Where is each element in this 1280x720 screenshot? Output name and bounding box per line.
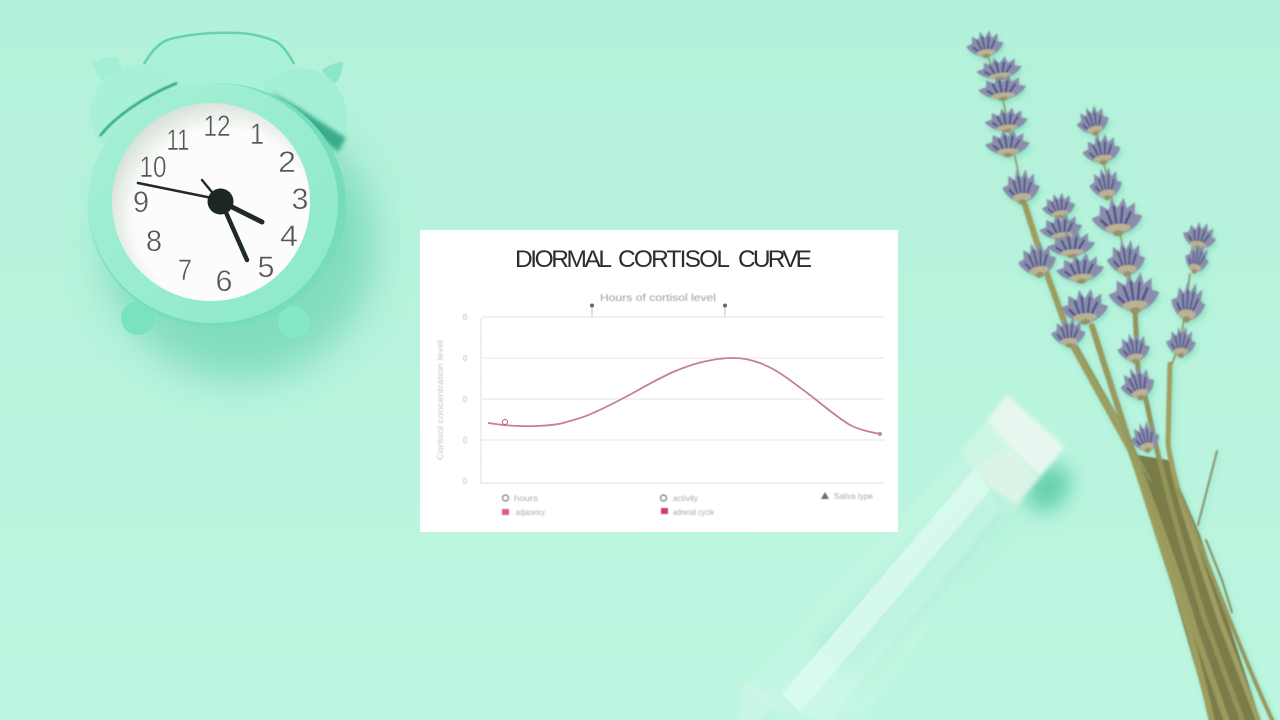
legend item: hours: hours bbox=[514, 494, 538, 503]
grid and axes bbox=[479, 317, 884, 484]
clock face bbox=[112, 103, 310, 301]
clock body bbox=[88, 83, 346, 327]
tube shadow bbox=[810, 455, 1080, 680]
curve start marker bbox=[502, 420, 508, 424]
icon: collection tube bbox=[738, 395, 1065, 720]
lavender stem bundle bbox=[986, 50, 1274, 720]
chart annotation bracket bbox=[590, 304, 727, 317]
clock numerals: 12 bbox=[204, 110, 230, 143]
y-axis label: Cortisol concentration level bbox=[436, 340, 445, 460]
chart title: CURVE bbox=[738, 246, 812, 273]
clock numerals: 7 bbox=[178, 254, 192, 287]
legend item: sample type: Saliva type bbox=[834, 492, 874, 501]
clock bell right bbox=[262, 68, 347, 150]
clock shadow bbox=[105, 110, 375, 380]
clock numerals: 6 bbox=[216, 265, 232, 298]
card background bbox=[420, 230, 898, 532]
clock numerals: 1 bbox=[250, 118, 264, 151]
clock numerals: 5 bbox=[258, 251, 274, 284]
legend item: activity: activity bbox=[673, 494, 698, 503]
legend item: hours bbox=[502, 494, 538, 503]
clock bell left bbox=[90, 64, 185, 160]
tube base bbox=[738, 680, 778, 720]
chart title: CORTISOL bbox=[618, 246, 730, 273]
y-axis tick labels: 0 bbox=[463, 313, 468, 322]
clock hub bbox=[208, 188, 234, 214]
legend item: activity bbox=[660, 494, 698, 503]
clock numerals: 3 bbox=[292, 183, 308, 216]
clock handle bbox=[144, 32, 295, 92]
tube barrel bbox=[745, 452, 1017, 720]
legend item: adjacency bbox=[502, 508, 545, 517]
cortisol curve bbox=[488, 358, 880, 434]
panel: chart card bbox=[420, 230, 898, 532]
chart title bbox=[515, 246, 812, 273]
y-axis tick labels: 0 bbox=[463, 477, 468, 486]
clock numerals bbox=[133, 110, 308, 298]
clock numerals: 4 bbox=[280, 220, 298, 253]
clock numerals: 2 bbox=[278, 146, 296, 179]
y-axis tick labels: 0 bbox=[463, 395, 468, 404]
clock bell right crease bbox=[270, 92, 346, 152]
tube lower band bbox=[800, 490, 1000, 720]
chart title: DIORMAL bbox=[515, 246, 612, 273]
clock handle edge bbox=[144, 33, 294, 64]
clock foot right bbox=[278, 306, 310, 338]
chart annotation label: Hours of cortisol level bbox=[600, 293, 716, 304]
lavender flower heads bbox=[964, 29, 1219, 456]
y-axis tick labels bbox=[463, 313, 468, 486]
legend item: adrenal: adrenal cycle bbox=[673, 508, 714, 517]
clock hands bbox=[138, 180, 262, 260]
clock ear left bbox=[93, 57, 122, 81]
clock numerals: 11 bbox=[166, 124, 190, 157]
y-axis tick labels: 0 bbox=[463, 436, 468, 445]
tube inner stripe bbox=[782, 468, 990, 712]
clock numerals: 9 bbox=[133, 186, 149, 219]
clock ear right bbox=[322, 62, 343, 86]
y-axis tick labels: 0 bbox=[463, 354, 468, 363]
curve end marker bbox=[878, 432, 882, 436]
icon: alarm clock bbox=[88, 32, 347, 338]
clock numerals: 10 bbox=[140, 151, 166, 184]
legend item: adjacency: adjacency bbox=[516, 508, 545, 517]
chart legend bbox=[502, 492, 874, 517]
clock numerals: 8 bbox=[146, 225, 162, 258]
lavender stem underlay bbox=[1138, 455, 1262, 720]
clock rim bbox=[88, 83, 338, 323]
lavender bouquet bbox=[964, 29, 1274, 720]
clock bell left crease bbox=[100, 83, 177, 136]
tube cap top face bbox=[987, 395, 1065, 477]
tube lower cap section bbox=[973, 445, 1040, 505]
line chart bbox=[436, 313, 884, 486]
tube flange bbox=[960, 420, 1007, 467]
clock foot left bbox=[121, 301, 155, 335]
